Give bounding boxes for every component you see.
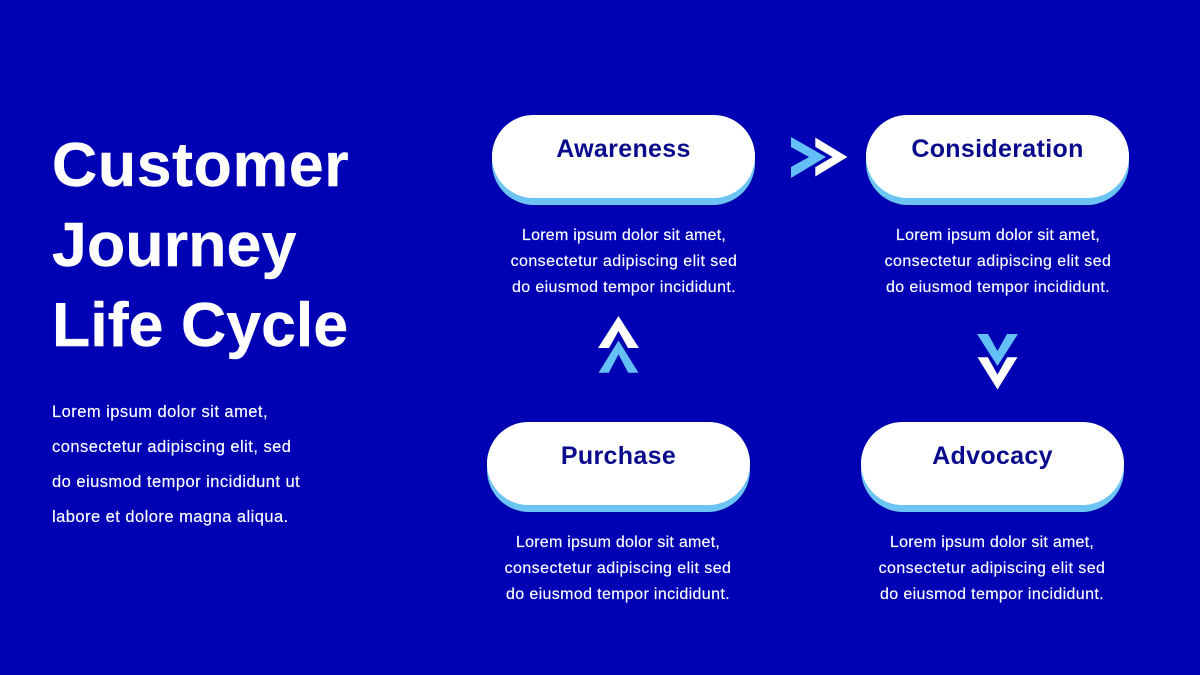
text: Advocacy description: do eiusmod tempor incididunt. xyxy=(880,586,1104,603)
intro text block: do eiusmod tempor incididunt ut xyxy=(52,473,300,491)
pill: Awareness xyxy=(491,114,756,206)
text: Advocacy description: consectetur adipiscing elit sed xyxy=(879,560,1105,577)
pill: Advocacy xyxy=(860,421,1125,513)
pill: Awareness: Awareness xyxy=(556,134,691,162)
text: Awareness description: Lorem ipsum dolor sit amet, xyxy=(522,227,726,244)
pill: Purchase xyxy=(486,421,751,513)
text: Purchase description: consectetur adipiscing elit sed xyxy=(505,560,731,577)
text: Consideration description: Lorem ipsum dolor sit amet, xyxy=(896,227,1100,244)
text: Purchase description: do eiusmod tempor incididunt. xyxy=(506,586,730,603)
text: Awareness description xyxy=(511,227,737,296)
arrow: right chevrons xyxy=(791,136,848,178)
intro text block xyxy=(52,403,300,526)
intro text block: labore et dolore magna aliqua. xyxy=(52,508,289,526)
text: Consideration description: consectetur adipiscing elit sed xyxy=(885,253,1111,270)
pill: Purchase: Purchase xyxy=(561,442,676,470)
text: Consideration description xyxy=(885,227,1111,296)
arrow: down chevrons xyxy=(976,334,1018,390)
text: Advocacy description xyxy=(879,534,1105,603)
text: Awareness description: consectetur adipiscing elit sed xyxy=(511,253,737,270)
arrow: up chevrons xyxy=(598,316,640,374)
text: Advocacy description: Lorem ipsum dolor sit amet, xyxy=(890,534,1094,551)
text: Purchase description: Lorem ipsum dolor sit amet, xyxy=(516,534,720,551)
pill: Advocacy: Advocacy xyxy=(932,442,1053,470)
intro text block: Lorem ipsum dolor sit amet, xyxy=(52,403,268,421)
intro text block: consectetur adipiscing elit, sed xyxy=(52,438,291,456)
pill: Consideration xyxy=(865,114,1130,206)
text: Consideration description: do eiusmod tempor incididunt. xyxy=(886,279,1110,296)
text: Purchase description xyxy=(505,534,731,603)
title: Customer xyxy=(52,130,349,200)
title xyxy=(52,130,349,360)
title: Journey xyxy=(52,210,297,280)
pill: Consideration: Consideration xyxy=(911,134,1084,162)
text: Awareness description: do eiusmod tempor incididunt. xyxy=(512,279,736,296)
title: Life Cycle xyxy=(52,290,348,360)
